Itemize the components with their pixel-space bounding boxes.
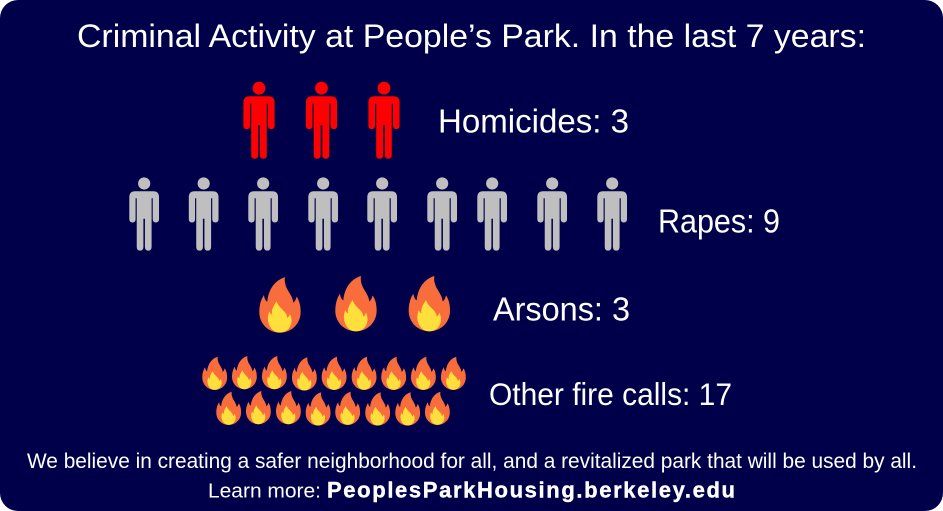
footer link line	[208, 478, 735, 502]
other fire calls row	[202, 356, 732, 426]
homicides row	[243, 82, 629, 159]
title: Criminal Activity at People’s Park. In the last 7 years:	[77, 18, 866, 54]
website url: PeoplesParkHousing.berkeley.edu	[327, 478, 735, 502]
label: homicides: Homicides: 3	[438, 102, 629, 140]
icons: red people	[243, 82, 400, 159]
icons: grey people	[129, 177, 627, 251]
learn more label: Learn more:	[208, 480, 321, 502]
icons: small flames	[202, 356, 466, 426]
arsons row	[259, 276, 630, 333]
icons: large flames	[259, 276, 450, 333]
rapes row	[129, 177, 780, 251]
footer statement: We believe in creating a safer neighborhood for all, and a revitalized park that will be used by all.	[27, 450, 917, 473]
label: rapes: Rapes: 9	[658, 202, 780, 240]
label: other fire calls: Other fire calls: 17	[489, 376, 732, 412]
label: arsons: Arsons: 3	[493, 290, 630, 328]
